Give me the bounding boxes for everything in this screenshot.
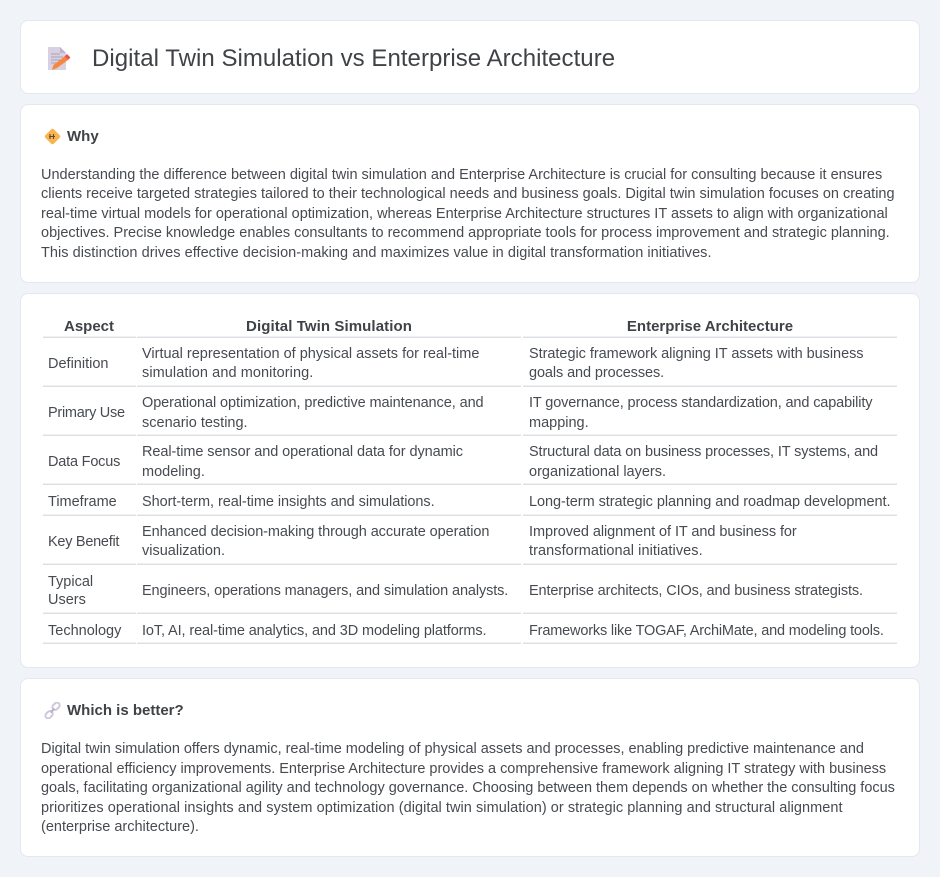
text: simulation and monitoring. bbox=[142, 365, 313, 381]
text: Virtual representation of physical assets for real-time bbox=[142, 346, 479, 362]
text: visualization. bbox=[142, 543, 225, 559]
text: operational efficiency improvements. Enterprise Architecture provides a comprehensive framework aligning IT strategy with business bbox=[41, 761, 886, 777]
text: organizational layers. bbox=[529, 464, 666, 480]
row: primary use bbox=[48, 395, 872, 431]
icon: link bbox=[44, 702, 61, 719]
text: Primary Use bbox=[48, 405, 125, 421]
heading: why: Why bbox=[67, 128, 99, 145]
text: scenario testing. bbox=[142, 415, 248, 431]
row: technology bbox=[48, 623, 884, 639]
icon: warning diamond bbox=[44, 128, 60, 144]
text: prioritizes operational insights and system optimization (digital twin simulation) or strategic planning and structural alignment bbox=[41, 800, 843, 816]
text: objectives. Precise knowledge enables consultants to recommend appropriate tools for process improvement and strategic planning. bbox=[41, 225, 890, 241]
text: Timeframe bbox=[48, 494, 117, 510]
icon: document with pencil bbox=[48, 47, 70, 70]
text: IoT, AI, real-time analytics, and 3D modeling platforms. bbox=[142, 623, 486, 639]
text: mapping. bbox=[529, 415, 589, 431]
title: Digital Twin Simulation vs Enterprise Architecture bbox=[92, 45, 615, 72]
row: key benefit bbox=[48, 524, 797, 559]
text: This distinction drives effective decision-making and maximizes value in digital transformation initiatives. bbox=[41, 245, 712, 261]
text: Key Benefit bbox=[48, 534, 119, 550]
text: Short-term, real-time insights and simulations. bbox=[142, 494, 435, 510]
text: Data Focus bbox=[48, 454, 120, 470]
text: clients receive targeted strategies tailored to their technological needs and business goals. Digital twin simulation focuses on creating bbox=[41, 186, 895, 202]
panel: why bbox=[20, 104, 920, 283]
column header: enterprise architecture: Enterprise Architecture bbox=[627, 318, 793, 335]
row: timeframe bbox=[48, 494, 890, 510]
text: Users bbox=[48, 592, 86, 608]
column header: digital twin: Digital Twin Simulation bbox=[246, 318, 412, 335]
text: modeling. bbox=[142, 464, 205, 480]
text: Enterprise architects, CIOs, and business strategists. bbox=[529, 583, 863, 599]
text: Strategic framework aligning IT assets with business bbox=[529, 346, 864, 362]
text block: why bbox=[41, 167, 895, 261]
text: Improved alignment of IT and business for bbox=[529, 524, 797, 540]
heading: which is better: Which is better? bbox=[67, 702, 184, 719]
text: Technology bbox=[48, 623, 121, 639]
text: goals and processes. bbox=[529, 365, 664, 381]
text: Operational optimization, predictive maintenance, and bbox=[142, 395, 484, 411]
row: typical users bbox=[48, 574, 863, 608]
text: Long-term strategic planning and roadmap development. bbox=[529, 494, 890, 510]
text: transformational initiatives. bbox=[529, 543, 703, 559]
table bbox=[43, 318, 897, 644]
row: data focus bbox=[48, 444, 878, 480]
panel: which is better bbox=[20, 678, 920, 857]
text: IT governance, process standardization, and capability bbox=[529, 395, 872, 411]
text: real-time virtual models for operational optimization, whereas Enterprise Architecture structures IT assets to align with organizational bbox=[41, 206, 888, 222]
text: Structural data on business processes, IT systems, and bbox=[529, 444, 878, 460]
text: goals, facilitating organizational agility and technology governance. Choosing between them depends on whether the consulting focus bbox=[41, 780, 895, 796]
text: Definition bbox=[48, 356, 108, 372]
text: Frameworks like TOGAF, ArchiMate, and modeling tools. bbox=[529, 623, 884, 639]
row: definition bbox=[48, 346, 864, 381]
text: Digital twin simulation offers dynamic, real-time modeling of physical assets and processes, enabling predictive maintenance and bbox=[41, 741, 864, 757]
text: (enterprise architecture). bbox=[41, 819, 199, 835]
text: Typical bbox=[48, 574, 93, 590]
column header: aspect: Aspect bbox=[64, 318, 114, 335]
panel: comparison table bbox=[20, 293, 920, 668]
text: Real-time sensor and operational data for dynamic bbox=[142, 444, 463, 460]
text: Enhanced decision-making through accurate operation bbox=[142, 524, 489, 540]
text: Understanding the difference between digital twin simulation and Enterprise Architecture is crucial for consulting because it ensures bbox=[41, 167, 882, 183]
header panel bbox=[20, 20, 920, 94]
text: Engineers, operations managers, and simulation analysts. bbox=[142, 583, 508, 599]
text block: which is better bbox=[41, 741, 895, 835]
